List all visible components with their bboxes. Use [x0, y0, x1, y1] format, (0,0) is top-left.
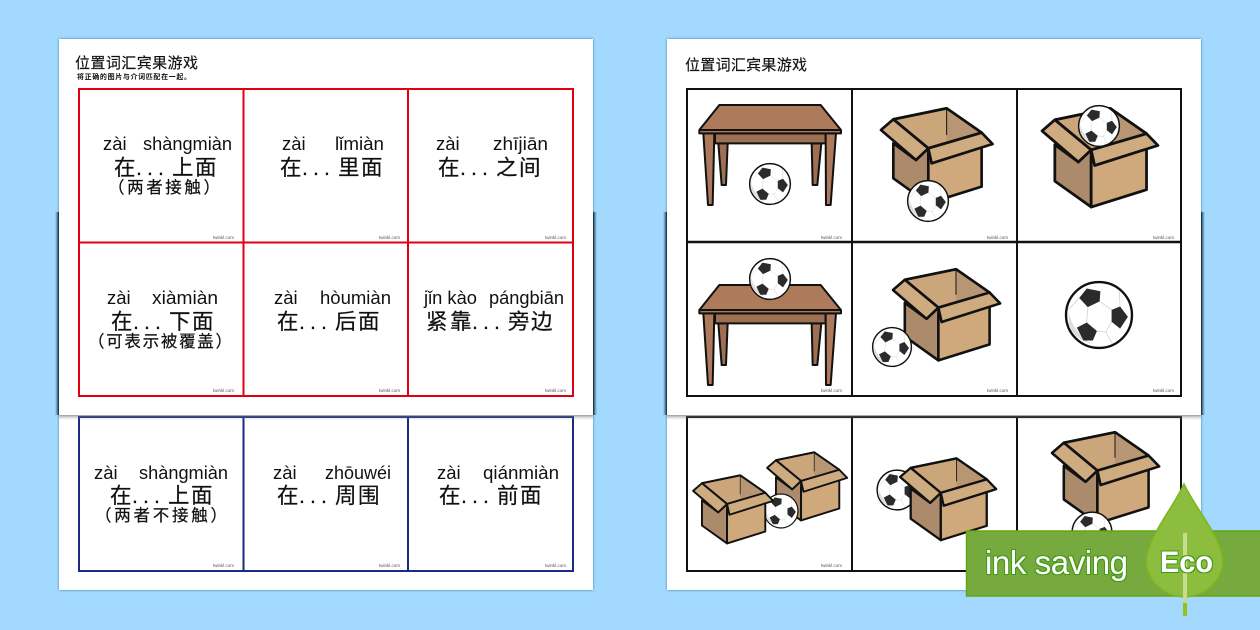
- card: zai shangmian contact: zài: [103, 133, 127, 154]
- card: zai shangmian contact: shàngmiàn: [143, 133, 232, 154]
- card: zai qianmian: zài: [437, 462, 461, 483]
- watermarks blue row: [213, 563, 566, 568]
- card: zai xiamian: （可表示被覆盖）: [88, 332, 232, 351]
- card: zai zhouwei: [273, 462, 391, 508]
- title: 位置词汇宾果游戏: [685, 57, 807, 74]
- card: zai xiamian: zài: [107, 287, 131, 308]
- card: zai xiamian: [88, 287, 232, 351]
- card: jin kao pangbian: jǐn kào: [423, 287, 477, 308]
- card: zai shangmian no contact: zài: [94, 462, 118, 483]
- card: zai shangmian no contact: （两者不接触）: [95, 506, 227, 525]
- watermarks: twinkl.com: [987, 235, 1008, 240]
- watermarks red rows: twinkl.com: [379, 388, 400, 393]
- picture: ball behind box: [877, 458, 996, 540]
- card: zai shangmian no contact: 在...上面: [110, 484, 213, 508]
- card: zai zhouwei: zhōuwéi: [325, 462, 391, 483]
- card: zai limian: [280, 133, 384, 180]
- watermarks red rows: twinkl.com: [545, 388, 566, 393]
- card: zai xiamian: xiàmiàn: [152, 287, 218, 308]
- watermarks red rows: twinkl.com: [213, 388, 234, 393]
- card: jin kao pangbian: pángbiān: [489, 287, 564, 308]
- instruction: 将正确的图片与介词匹配在一起。: [77, 72, 191, 81]
- watermarks: twinkl.com: [821, 388, 842, 393]
- Eco label: Eco: [1160, 546, 1213, 579]
- watermarks red rows: twinkl.com: [545, 235, 566, 240]
- card: zai shangmian contact: [103, 133, 232, 197]
- picture: ball beside box: [873, 269, 1000, 366]
- panel: left front sheet: [55, 39, 597, 420]
- card: zai houmian: zài: [274, 287, 298, 308]
- card: zai zhijian: [436, 133, 548, 180]
- watermarks blue row: twinkl.com: [545, 563, 566, 568]
- blue card grid: [79, 417, 573, 571]
- red card grid: [79, 89, 573, 396]
- card: zai zhijian: zài: [436, 133, 460, 154]
- card: zai zhijian: 在...之间: [438, 156, 541, 180]
- black picture grid: [687, 89, 1181, 396]
- picture: ball on table: [699, 259, 841, 385]
- card: zai qianmian: [437, 462, 559, 508]
- panel: right front sheet: [663, 39, 1205, 420]
- card: zai shangmian no contact: shàngmiàn: [139, 462, 228, 483]
- title: 位置词汇宾果游戏: [75, 55, 198, 72]
- card: zai zhijian: zhījiān: [493, 133, 548, 154]
- black picture grid row 3: [687, 417, 1181, 571]
- card: zai zhouwei: 在...周围: [277, 484, 380, 508]
- picture: ball on box: [1042, 106, 1158, 207]
- card: zai shangmian contact: （两者接触）: [108, 178, 220, 197]
- card: zai houmian: 在...后面: [277, 310, 380, 334]
- card: zai houmian: [274, 287, 391, 334]
- watermarks: twinkl.com: [821, 235, 842, 240]
- panel: left back sheet: [59, 212, 593, 590]
- card: zai limian: 在...里面: [280, 156, 383, 180]
- eco banner: [966, 484, 1260, 616]
- watermarks red rows: [213, 235, 566, 393]
- watermarks: twinkl.com: [987, 388, 1008, 393]
- card: zai shangmian contact: 在...上面: [114, 156, 217, 180]
- watermarks: twinkl.com: [1153, 388, 1174, 393]
- panel: right back sheet: [667, 212, 1201, 590]
- card: zai limian: lǐmiàn: [335, 133, 384, 154]
- watermark: twinkl.com: [821, 563, 842, 568]
- watermarks: twinkl.com: [1153, 235, 1174, 240]
- card: zai houmian: hòumiàn: [320, 287, 391, 308]
- picture: ball in front of box: [1052, 432, 1159, 552]
- watermarks red rows: twinkl.com: [213, 235, 234, 240]
- picture: ball under table: [699, 105, 841, 205]
- picture: ball alone: [1066, 282, 1132, 348]
- watermarks: [821, 235, 1174, 393]
- picture: ball between two boxes: [693, 452, 847, 543]
- card: zai xiamian: 在...下面: [111, 310, 214, 334]
- card: zai zhouwei: zài: [273, 462, 297, 483]
- card: zai shangmian no contact: [94, 462, 228, 525]
- card: jin kao pangbian: [423, 287, 564, 334]
- icon: leaf drop: [1146, 484, 1223, 616]
- watermarks blue row: twinkl.com: [213, 563, 234, 568]
- watermarks red rows: twinkl.com: [379, 235, 400, 240]
- card: jin kao pangbian: 紧靠...旁边: [426, 310, 553, 334]
- ink saving label: ink saving: [985, 544, 1128, 581]
- card: zai limian: zài: [282, 133, 306, 154]
- card: zai qianmian: 在...前面: [439, 484, 542, 508]
- card: zai qianmian: qiánmiàn: [483, 462, 559, 483]
- picture: ball in front of box: [881, 108, 993, 221]
- watermarks blue row: twinkl.com: [379, 563, 400, 568]
